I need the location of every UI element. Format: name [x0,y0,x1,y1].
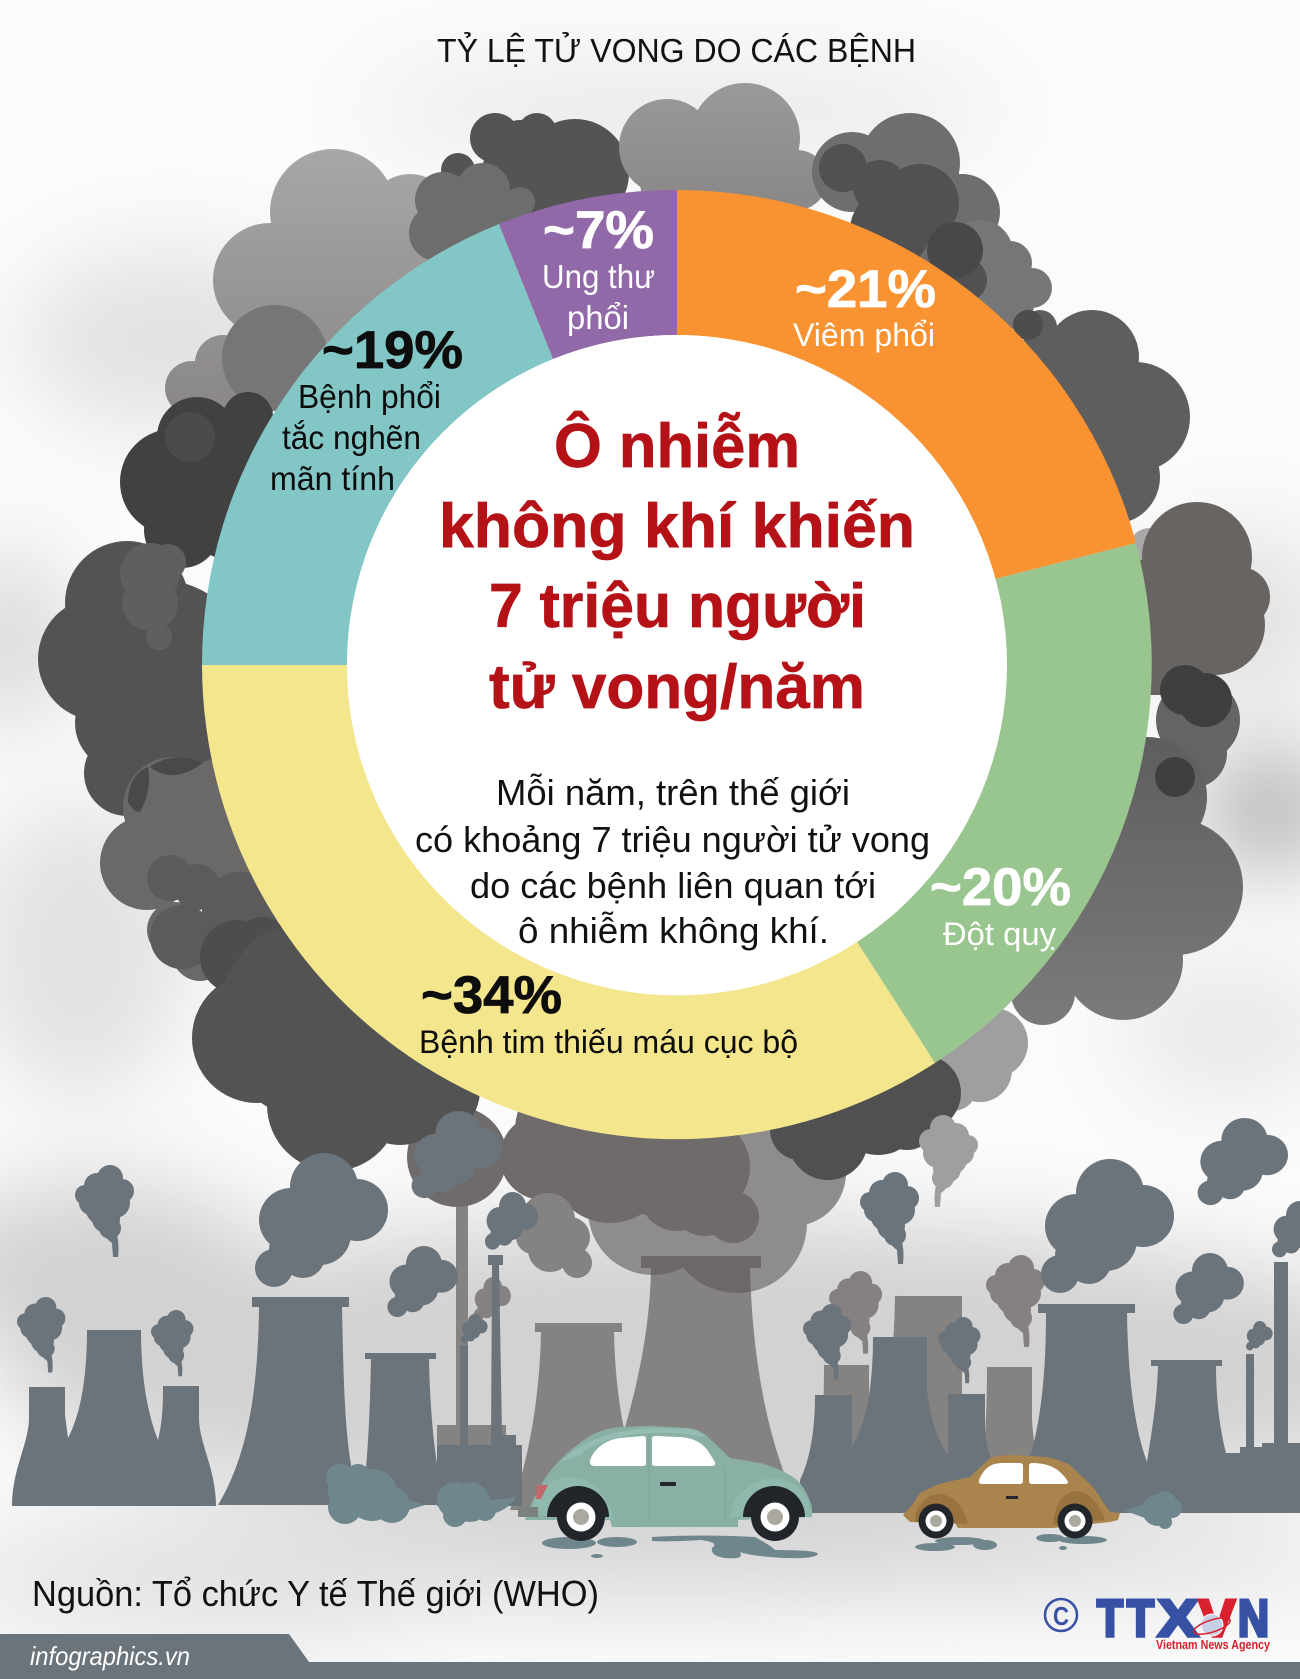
title: TỶ LỆ TỬ VONG DO CÁC BỆNH [437,32,916,69]
label: ischemic heart disease: Bệnh tim thiếu máu cục bộ [419,1024,798,1060]
smoke cloud: lower-centre darker puffs [407,1070,759,1243]
label: stroke [930,858,1071,952]
car body [903,1455,1120,1528]
fenders [915,1491,1105,1525]
source line: Nguồn: Tổ chức Y tế Thế giới (WHO) [32,1573,599,1614]
label: COPD: tắc nghẽn [282,419,421,456]
teal car [518,1426,812,1541]
smoke cloud: dark left shoulder [120,392,277,568]
headline [439,412,915,722]
blue-gray smoke puffs [17,1111,1300,1383]
wordmark: X [1158,1590,1198,1648]
label: lung cancer: phổi [567,299,629,336]
smoke puff: gray above right towers [919,1115,978,1207]
smoke cloud: upper-left medium puff [222,305,328,411]
label: COPD: mãn tính [270,460,395,497]
copyright mark [1045,1599,1077,1631]
gray smoke puffs behind towers [474,1255,1045,1354]
segment: stroke 20% [857,543,1152,1063]
label: lung cancer: Ung thư [542,258,655,295]
car exhaust pipe [518,1507,538,1517]
segment: pneumonia 21% [677,190,1136,579]
segment: ischemic heart disease 34% [202,665,935,1139]
wordmark: N [1238,1590,1269,1648]
label: lung cancer [542,201,655,336]
door handle [660,1482,676,1486]
car body [525,1426,812,1527]
wordmark: T [1127,1590,1154,1648]
agency name: Vietnam News Agency [1156,1637,1271,1652]
label: stroke: ~20% [930,858,1071,917]
fender front and rear [530,1477,812,1520]
label: pneumonia: Viêm phổi [793,317,935,353]
car wheels [918,1504,1092,1538]
body text: có khoảng 7 triệu người tử vong [415,819,930,860]
donut chart: causes of death [202,190,1152,1139]
smoke cloud: right mid [1128,528,1172,572]
footer site name: infographics.vn [30,1641,190,1671]
door lines and tail light [649,1434,725,1520]
body text: do các bệnh liên quan tới [470,865,876,906]
logo: TTXVN [1045,1590,1271,1652]
label: ischemic heart disease: ~34% [421,966,562,1025]
footer bar [0,1634,1300,1679]
door handle and lines [1006,1496,1018,1499]
wordmark [1097,1590,1269,1648]
headline: 7 triệu người [489,572,866,641]
globe [1192,1614,1232,1638]
segment: COPD 19% [202,224,553,665]
segment: lung cancer 7% [499,190,677,359]
car roof highlight [560,1428,705,1462]
blue-gray tower: large left [218,1297,361,1505]
blue-gray cooling towers: left group [12,1330,216,1506]
label: COPD [270,321,463,497]
label: ischemic heart disease [419,966,798,1060]
headline: không khí khiến [439,492,915,561]
label: COPD: ~19% [322,321,463,380]
copyright mark: C [1053,1601,1069,1631]
smoke cloud: central gray column [588,1090,846,1293]
body text: Mỗi năm, trên thế giới [496,772,850,813]
headline: tử vong/năm [489,653,865,722]
smoke cloud: lower-left mid [100,757,270,981]
smoke cloud: upper-right gray [812,113,1000,270]
smoke cloud: right dark [1000,310,1190,524]
car windows [979,1463,1023,1484]
smoke cloud: lower right [929,1008,1028,1111]
blue-gray towers and factory: right group [800,1262,1300,1513]
headline: Ô nhiễm [554,412,800,481]
smoke cloud: top dark and gray [441,113,629,230]
body text: ô nhiễm không khí. [518,910,829,951]
wordmark: T [1097,1590,1123,1648]
label: pneumonia [793,260,936,353]
smoke cloud: gray puff near chimney [516,1193,592,1278]
gray chimneys and cooling towers behind [437,1203,1045,1510]
blue-gray tower and factory block [362,1255,522,1506]
smoke cloud: upper-left light [165,149,460,435]
label: lung cancer: ~7% [543,201,654,260]
label: pneumonia: ~21% [795,260,936,319]
label: stroke: Đột quỵ [943,916,1056,952]
centre white disc [347,335,1007,995]
exhaust smoke and puddles [326,1464,1182,1558]
car side windows [590,1436,646,1466]
body text [415,772,930,951]
brown car [903,1455,1120,1538]
car wheels [547,1486,805,1541]
wordmark: V [1199,1590,1235,1648]
smoke cloud: left main [38,541,250,816]
smoke cloud: darker lens over tower top [641,1256,761,1293]
label: COPD: Bệnh phổi [298,378,441,415]
smoke cloud: bottom-left dark [192,920,480,1171]
